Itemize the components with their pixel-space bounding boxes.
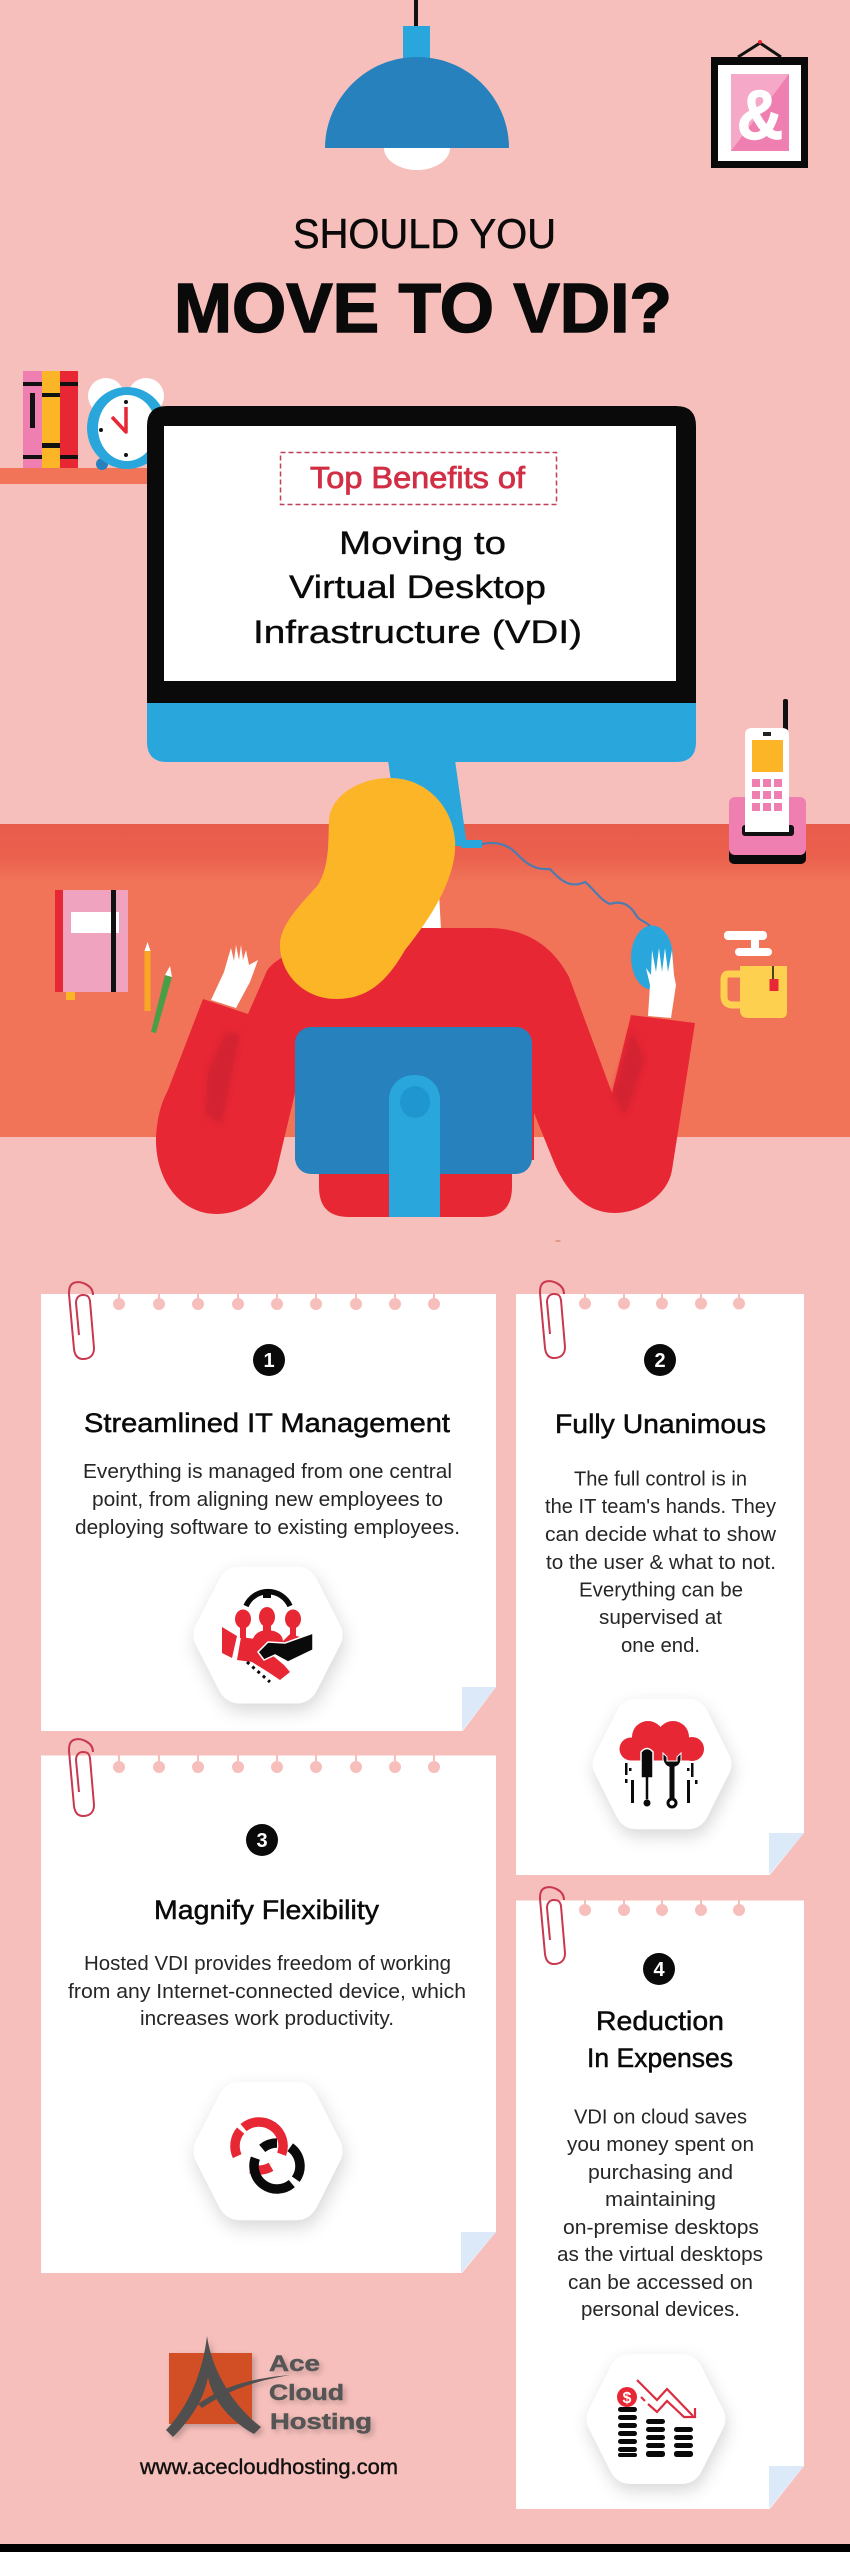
person at desk xyxy=(156,778,695,1217)
red sweater and arms xyxy=(156,928,695,1214)
title xyxy=(174,210,672,347)
icon: cordless phone xyxy=(729,699,806,864)
body text: one end. xyxy=(621,1635,700,1657)
body text: the IT team's hands. They xyxy=(545,1496,776,1518)
body text: Everything is managed from one central xyxy=(83,1461,452,1483)
icon: pencils xyxy=(144,942,172,1033)
logo wordmark: Cloud xyxy=(269,2380,344,2405)
heading: Reduction xyxy=(596,2006,724,2036)
logo wordmark xyxy=(269,2351,372,2434)
body text: increases work productivity. xyxy=(140,2008,394,2030)
monitor screen xyxy=(164,426,676,681)
screen heading: Moving to xyxy=(339,525,506,561)
logo mark xyxy=(166,2336,290,2437)
body text: The full control is in xyxy=(574,1468,747,1490)
hexagon xyxy=(587,2354,725,2484)
bottom bar xyxy=(0,2544,850,2552)
body text: Everything can be xyxy=(579,1580,743,1602)
hexagon xyxy=(593,1699,731,1829)
punched holes xyxy=(114,1755,440,1772)
badge 1 xyxy=(253,1344,285,1376)
screen heading xyxy=(253,525,582,650)
title: SHOULD YOU xyxy=(293,210,556,257)
page curl xyxy=(461,2232,497,2274)
body text: you money spent on xyxy=(567,2134,754,2156)
badge 3: 3 xyxy=(256,1830,268,1852)
punched holes xyxy=(114,1294,440,1310)
badge 3 xyxy=(246,1824,278,1856)
icon: coffee mug xyxy=(724,931,787,1018)
chair back xyxy=(295,1027,532,1174)
page curl xyxy=(769,2466,805,2510)
icon: linked rings xyxy=(235,2122,300,2189)
page curl xyxy=(462,1687,497,1732)
hair xyxy=(280,778,455,999)
monitor base panel xyxy=(147,690,696,762)
paper clip xyxy=(540,1281,565,1358)
panel: card 4 xyxy=(516,1887,805,2510)
body text: Hosted VDI provides freedom of working xyxy=(84,1953,451,1975)
left hand xyxy=(211,945,258,1008)
monitor stand xyxy=(388,760,467,846)
screen heading: Infrastructure (VDI) xyxy=(253,614,582,650)
badge 4: 4 xyxy=(653,1959,665,1981)
badge 1: 1 xyxy=(263,1350,275,1372)
icon: falling coin stacks: $ xyxy=(623,2390,632,2407)
body text: from any Internet-connected device, which xyxy=(68,1981,466,2003)
body text: to the user & what to not. xyxy=(546,1552,776,1574)
icon: ceiling lamp xyxy=(325,0,509,170)
heading: Magnify Flexibility xyxy=(154,1895,380,1925)
body text xyxy=(557,2106,763,2321)
cable plug xyxy=(461,840,482,848)
logo: Ace Cloud Hosting xyxy=(166,2336,372,2437)
punched holes xyxy=(580,1900,744,1916)
title: MOVE TO VDI? xyxy=(174,269,672,347)
hexagon xyxy=(194,2082,342,2220)
body text xyxy=(545,1468,777,1657)
body text: VDI on cloud saves xyxy=(574,2106,747,2128)
page curl xyxy=(769,1833,805,1876)
heading xyxy=(587,2006,733,2073)
badge 2 xyxy=(644,1344,676,1376)
icon: notebook xyxy=(55,890,128,1000)
icon: framed ampersand picture xyxy=(711,40,808,168)
mouse cable xyxy=(461,843,652,928)
dashed label box xyxy=(280,452,556,504)
body text: on-premise desktops xyxy=(563,2217,759,2239)
neck xyxy=(410,893,441,930)
subtitle: top benefits: Top Benefits of xyxy=(310,460,525,495)
paper clip xyxy=(69,1739,94,1816)
body text: purchasing and xyxy=(588,2162,733,2184)
icon: team handshake gear xyxy=(222,1591,313,1682)
icon: alarm clock xyxy=(87,378,167,470)
body text: point, from aligning new employees to xyxy=(92,1489,443,1511)
logo wordmark: Ace xyxy=(269,2351,320,2376)
body text: personal devices. xyxy=(581,2299,740,2321)
body text: maintaining xyxy=(605,2189,716,2211)
body text: deploying software to existing employees. xyxy=(75,1517,460,1539)
icon: cloud tools xyxy=(620,1721,704,1807)
hexagon xyxy=(194,1566,342,1704)
paper clip xyxy=(540,1887,565,1964)
body text: supervised at xyxy=(599,1607,722,1629)
desk xyxy=(0,824,850,1137)
sleeve shading xyxy=(205,1032,240,1125)
panel: card 1 xyxy=(41,1282,497,1732)
panel: card 2 xyxy=(516,1281,805,1876)
screen heading: Virtual Desktop xyxy=(289,569,546,605)
icon: falling coin stacks xyxy=(617,2380,695,2457)
body text xyxy=(75,1461,460,1539)
panel: card 3 xyxy=(41,1739,497,2274)
body text: can decide what to show xyxy=(545,1524,777,1546)
chair column xyxy=(389,1075,440,1217)
monitor xyxy=(147,406,696,846)
icon: framed ampersand picture: & xyxy=(737,76,783,154)
badge 4 xyxy=(643,1953,675,1985)
body text xyxy=(68,1953,466,2030)
chair seat xyxy=(319,1170,512,1217)
monitor bezel xyxy=(147,406,696,703)
punched holes xyxy=(580,1294,744,1309)
heading: Streamlined IT Management xyxy=(84,1408,451,1438)
body text: can be accessed on xyxy=(568,2272,753,2294)
right hand xyxy=(646,948,676,1018)
paper clip xyxy=(69,1282,94,1359)
badge 2: 2 xyxy=(654,1350,666,1372)
heading: In Expenses xyxy=(587,2043,733,2073)
heading: Fully Unanimous xyxy=(555,1409,766,1439)
icon: books on shelf xyxy=(0,371,150,484)
body text: as the virtual desktops xyxy=(557,2244,763,2266)
icon: computer mouse xyxy=(631,926,673,990)
website url: www.acecloudhosting.com xyxy=(139,2456,398,2479)
logo wordmark: Hosting xyxy=(270,2409,372,2434)
